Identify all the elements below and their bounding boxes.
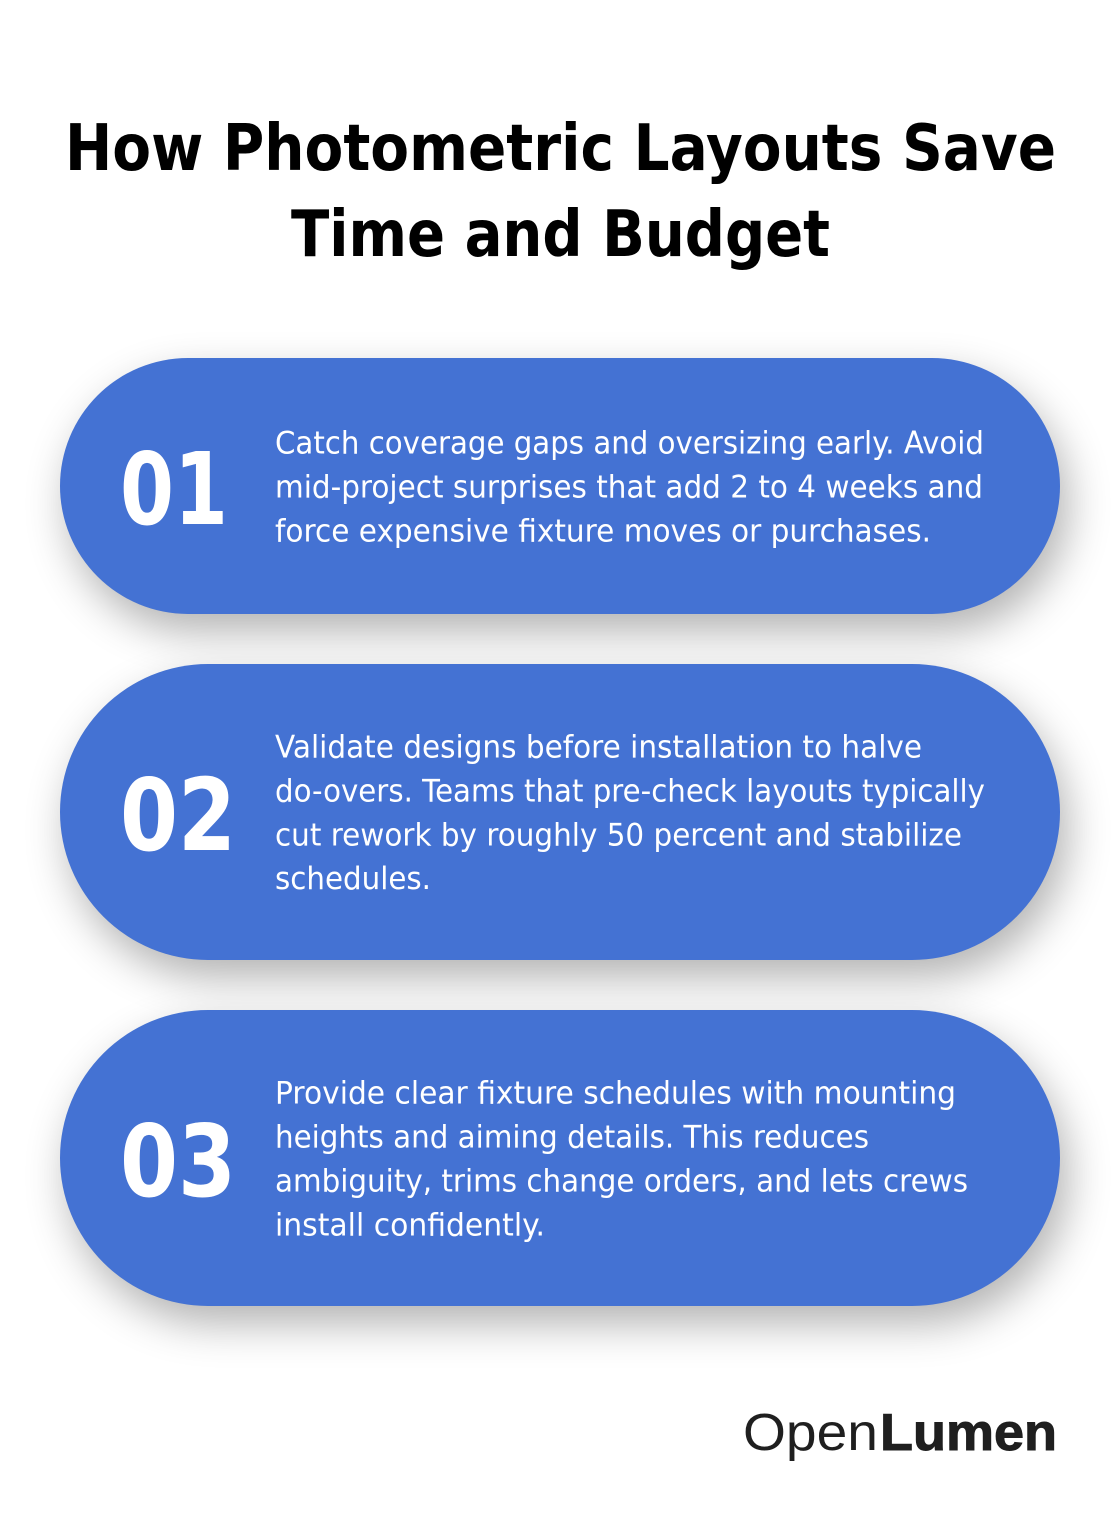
step 2 text (275, 730, 985, 897)
step 3 text (275, 1076, 968, 1244)
title (65, 112, 1056, 272)
logo: OpenLumen: Open (743, 1404, 878, 1462)
step 2 number: 02 (120, 757, 236, 874)
step 1 number: 01 (120, 431, 228, 548)
logo: OpenLumen (743, 1404, 1057, 1462)
title: Time and Budget (291, 198, 830, 272)
step 3 text: install confidently. (275, 1208, 545, 1244)
panel: step 1 pill (60, 358, 1060, 614)
step 1 text: Catch coverage gaps and oversizing early. Avoid (275, 426, 984, 462)
panel: step 2 pill (60, 664, 1060, 960)
step 2 text: cut rework by roughly 50 percent and stabilize (275, 818, 962, 854)
step 1 text (275, 426, 984, 550)
step 3 text: ambiguity, trims change orders, and lets crews (275, 1164, 968, 1200)
logo: OpenLumen: Lumen (880, 1404, 1057, 1462)
step 3 text: Provide clear fixture schedules with mounting (275, 1076, 956, 1112)
step 2 text: do-overs. Teams that pre-check layouts typically (275, 774, 985, 810)
step 1 text: mid-project surprises that add 2 to 4 weeks and (275, 470, 983, 506)
step 3 number: 03 (120, 1103, 236, 1220)
step 2 text: Validate designs before installation to halve (275, 730, 922, 766)
step 1 text: force expensive fixture moves or purchases. (275, 514, 931, 550)
panel: step 3 pill (60, 1010, 1060, 1306)
step 2 text: schedules. (275, 861, 431, 897)
step 3 text: heights and aiming details. This reduces (275, 1120, 869, 1156)
